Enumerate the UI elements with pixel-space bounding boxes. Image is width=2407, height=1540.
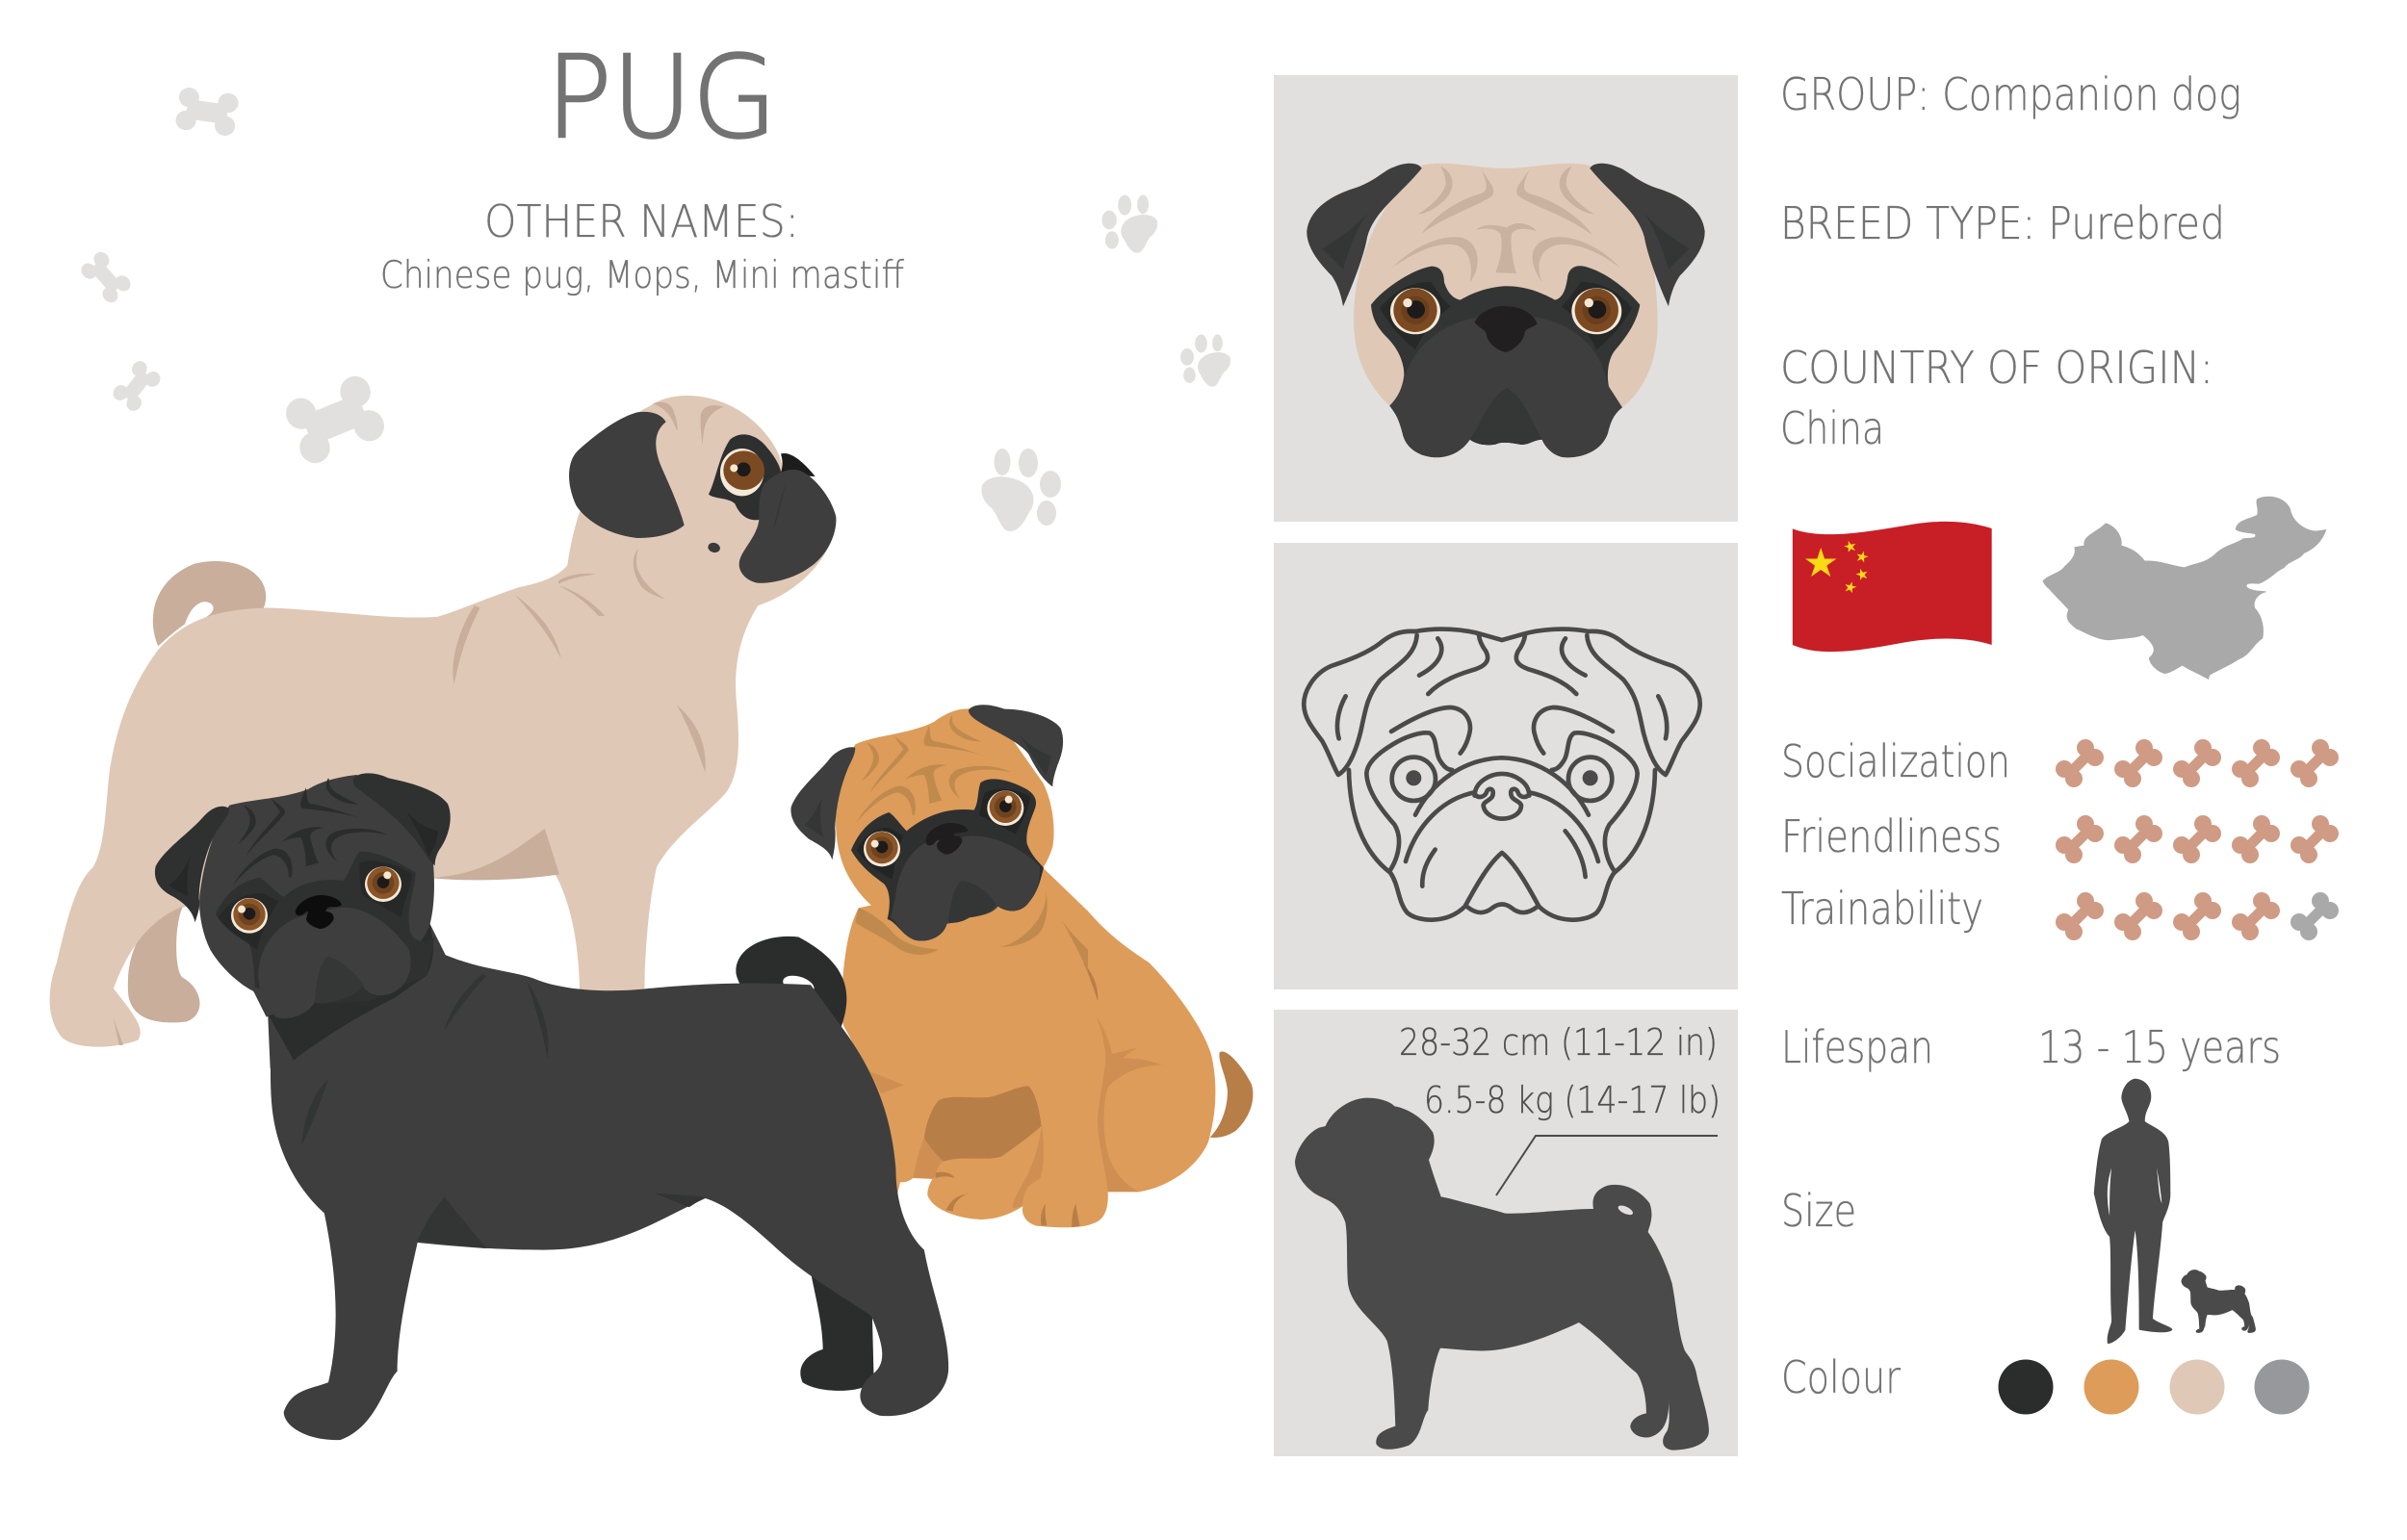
text: country of origin: COUNTRY OF ORIGIN: (1780, 342, 2213, 394)
icon: bone 2 (78, 249, 134, 305)
small dog silhouette (2182, 1270, 2256, 1333)
rating: trainability: Trainability (1781, 883, 1983, 935)
text: breed type: BREED TYPE: Purebred (1780, 197, 2225, 249)
rating: friendliness (1781, 810, 2339, 863)
text: group: GROUP: Companion dog (1780, 68, 2241, 120)
icon: paw 1 (981, 449, 1061, 531)
icon: bone 3 (110, 358, 164, 414)
text: lifespan label: Lifespan (1781, 1021, 1933, 1073)
map of China (2043, 497, 2326, 680)
icon: bone 1 (174, 87, 240, 137)
text: other names list: Chinese pug, Mops, Mini mastiff (380, 254, 904, 297)
title: PUG (546, 31, 777, 164)
size comparison: person and dog (2094, 1079, 2256, 1344)
panel: size silhouette (1274, 1010, 1738, 1456)
heading: other names: OTHER NAMES: (484, 195, 799, 247)
text: height: 28-32 cm (11-12 in) (1399, 1021, 1718, 1064)
rating: socialization (1781, 735, 2339, 787)
text: lifespan value: 13 - 15 years (2038, 1021, 2281, 1073)
text: size label: Size (1781, 1185, 1856, 1237)
pug outline drawing (1304, 629, 1700, 920)
text: colour label: Colour (1781, 1351, 1901, 1403)
text: china: China (1780, 402, 1884, 454)
flag of China (1793, 522, 1992, 652)
icon: paw 3 (1180, 335, 1230, 387)
panel: face line art (1274, 543, 1738, 989)
rating: trainability (1781, 883, 2339, 940)
panel: face colour (1274, 75, 1738, 522)
person silhouette (2094, 1079, 2172, 1344)
pug face illustration (1307, 164, 1705, 457)
fawn pug standing (50, 396, 836, 1047)
rating: friendliness: Friendliness (1781, 810, 2002, 862)
apricot pug sitting (790, 705, 1253, 1227)
rating: socialization: Socialization (1781, 735, 2010, 787)
black pug standing (155, 773, 948, 1440)
dog silhouette (1295, 1098, 1709, 1450)
illustration: three pugs (50, 396, 1253, 1440)
decorative bones and paws (78, 87, 1230, 531)
text: weight: 6.5-8 kg (14-17 lb) (1424, 1079, 1721, 1121)
icon: paw 2 (1101, 195, 1157, 253)
leader line (1496, 1136, 1718, 1195)
icon: bone 4 (281, 372, 389, 468)
colour swatches (1999, 1359, 2309, 1415)
